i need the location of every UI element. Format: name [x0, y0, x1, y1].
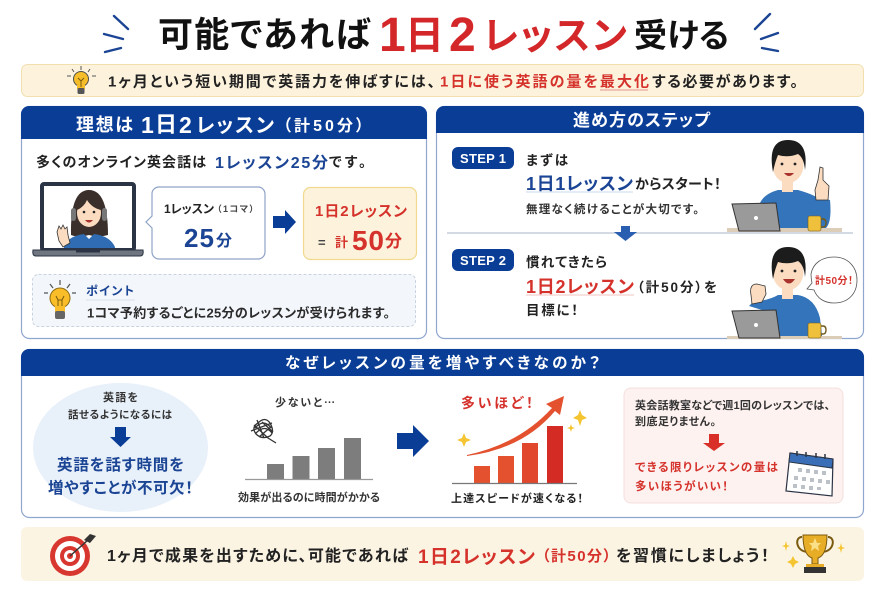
decorative title accent marks — [104, 14, 778, 52]
title: 1 — [379, 9, 406, 62]
icon: light bulb — [44, 280, 76, 319]
panel: why increase lesson volume — [21, 349, 864, 518]
arrow — [614, 226, 637, 241]
banner text: 1ヶ月という短い期間で英語力を伸ばすには、 — [108, 72, 435, 90]
banner text: 1日に使う英語の量を最大化 — [440, 72, 649, 90]
callout: one lesson 25 minutes: 25 — [184, 223, 214, 253]
panel heading — [76, 112, 364, 138]
callout: one lesson 25 minutes: 1レッスン — [164, 202, 214, 216]
banner text — [108, 72, 798, 90]
panel heading: なぜレッスンの量を増やすべきなのか？ — [285, 353, 600, 372]
panel: steps — [436, 106, 864, 339]
bubble: speaking time is essential: 英語を — [103, 390, 138, 404]
callout: weekly lessons are not enough: 多いほうがいい！ — [635, 479, 728, 493]
trend arrow — [467, 396, 564, 456]
icon: target with arrow — [50, 534, 96, 576]
bottom banner: （計50分） — [542, 548, 611, 565]
step 2: STEP 2 — [460, 253, 506, 268]
panel heading: 進め方のステップ — [573, 110, 711, 130]
callout: two lessons 50 minutes: 1日2レッスン — [315, 203, 408, 220]
panel heading: 日 — [155, 112, 177, 137]
callout: one lesson 25 minutes — [146, 187, 265, 259]
callout: weekly lessons are not enough: 英会話教室などで週1回のレッスンでは、 — [635, 398, 830, 412]
bar chart: few lessons: 効果が出るのに時間がかかる — [238, 490, 380, 504]
arrow — [397, 425, 429, 457]
speech bubble: 計50分！ — [815, 274, 853, 287]
icon: scribble — [251, 420, 276, 443]
intro text: 多くのオンライン英会話は — [36, 154, 206, 170]
bottom banner: 1ヶ月で成果を出すために、可能であれば — [107, 546, 409, 565]
arrow — [273, 210, 296, 234]
intro text — [36, 154, 366, 172]
callout: two lessons 50 minutes: 分 — [385, 232, 402, 251]
bubble: speaking time is essential: 増やすことが不可欠！ — [48, 478, 193, 497]
point box: ポイント — [86, 284, 134, 298]
bar chart: many lessons: 多いほど！ — [461, 395, 533, 411]
bar chart: many lessons — [451, 395, 587, 505]
callout: two lessons 50 minutes: 50 — [352, 225, 384, 256]
callout: one lesson 25 minutes: 分 — [216, 232, 232, 250]
step 1: からスタート！ — [635, 176, 721, 192]
bottom banner: を習慣にしましょう！ — [616, 547, 769, 565]
callout: two lessons 50 minutes — [304, 188, 416, 260]
icon: trophy with sparkles — [782, 535, 845, 573]
icon: light bulb — [67, 66, 96, 94]
panel heading: レッスン — [196, 115, 274, 137]
title: 2 — [449, 9, 476, 62]
intro text: です。 — [328, 154, 366, 170]
bubble: speaking time is essential — [33, 383, 208, 512]
intro text: 1レッスン25分 — [215, 154, 328, 172]
callout: two lessons 50 minutes: 計 — [335, 235, 348, 250]
step 1: 無理なく続けることが大切です。 — [526, 202, 699, 216]
step 2: 慣れてきたら — [526, 254, 607, 270]
icon: sparkles — [457, 410, 587, 447]
title: 受ける — [634, 17, 729, 54]
panel heading: 理想は — [76, 115, 133, 135]
bubble: speaking time is essential: 話せるようになるには — [68, 408, 173, 421]
icon: calendar — [786, 451, 833, 496]
banner text: する必要があります。 — [652, 72, 798, 90]
callout: weekly lessons are not enough: できる限りレッスンの量は — [634, 461, 779, 474]
step 1: 1日1レッスン — [526, 174, 633, 194]
bottom banner: 1日2レッスン — [418, 547, 535, 568]
top banner — [22, 64, 864, 96]
illustration: man pointing up at laptop — [727, 140, 842, 232]
callout: weekly lessons are not enough: 到底足りません。 — [635, 414, 716, 428]
bar chart: many lessons: 上達スピードが速くなる！ — [451, 491, 583, 505]
title: 日 — [405, 15, 444, 58]
step 1 — [452, 147, 721, 216]
step 1: STEP 1 — [460, 151, 506, 166]
illustration: woman on laptop video call — [33, 184, 143, 256]
step 2: （計50分）を — [637, 280, 717, 295]
title: 可能であれば — [158, 16, 371, 55]
panel heading: 2 — [179, 112, 192, 138]
panel heading: （計50分） — [283, 117, 364, 135]
step 2: 目標に！ — [526, 302, 578, 318]
bar chart: few lessons: 少ないと… — [275, 394, 335, 410]
bubble: speaking time is essential: 英語を話す時間を — [57, 456, 184, 474]
point box — [32, 274, 416, 326]
bar chart: few lessons — [238, 394, 380, 504]
title: レッスン — [483, 16, 627, 58]
callout: weekly lessons are not enough — [624, 388, 843, 503]
bottom banner — [21, 527, 864, 581]
panel heading: 1 — [141, 112, 154, 138]
title — [158, 9, 729, 62]
callout: two lessons 50 minutes: = — [318, 235, 326, 250]
panel: ideal two lessons a day — [21, 106, 427, 338]
step 1: まずは — [526, 152, 569, 168]
callout: one lesson 25 minutes: （1コマ） — [217, 204, 254, 214]
step 2 — [452, 249, 717, 318]
step 2: 1日2レッスン — [526, 277, 634, 297]
illustration: man with raised fist and speech bubble — [727, 247, 857, 339]
point box: 1コマ予約するごとに25分のレッスンが受けられます。 — [87, 306, 390, 320]
